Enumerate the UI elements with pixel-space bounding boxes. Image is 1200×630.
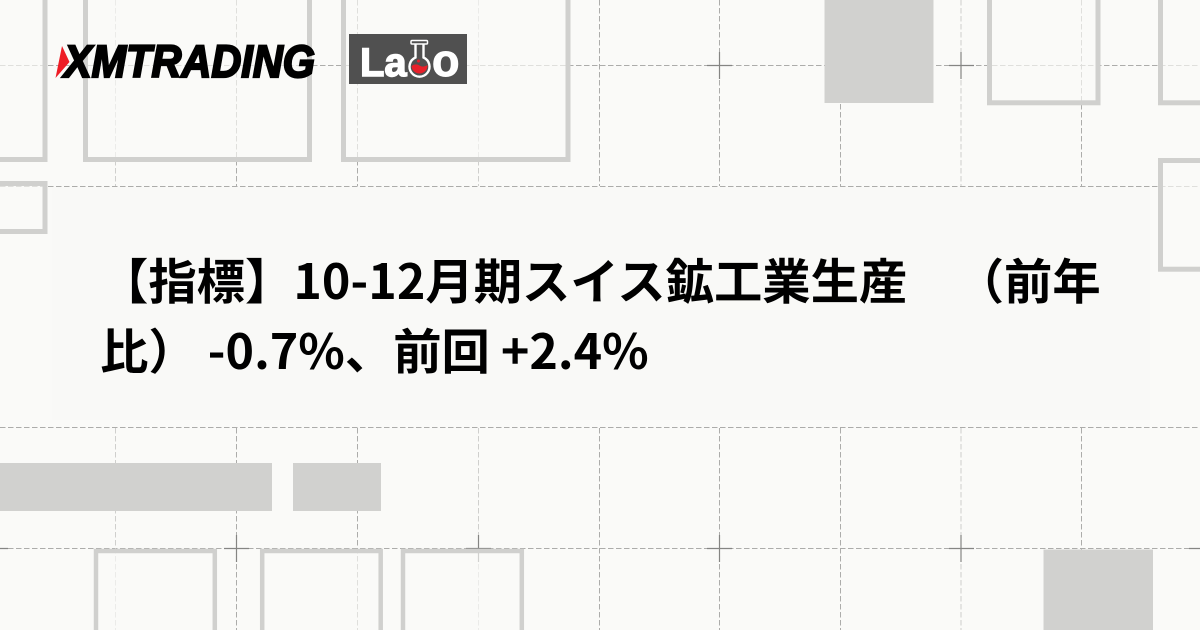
title: 比） -0.7%、前回 +2.4% [100, 313, 649, 383]
icon: flask [409, 40, 429, 77]
title [100, 243, 1101, 383]
logo: XMTRADING: XMTRADING [61, 36, 315, 87]
logo: Labo [349, 34, 467, 86]
title: 【指標】10-12月期スイス鉱工業生産 （前年 [100, 243, 1101, 313]
decorative frames: top row [0, 0, 1200, 269]
panel: title background [52, 187, 1150, 420]
logo: Labo: La [360, 41, 407, 85]
decorative frames: bottom row [96, 551, 522, 630]
logo: Labo: o [432, 35, 460, 86]
